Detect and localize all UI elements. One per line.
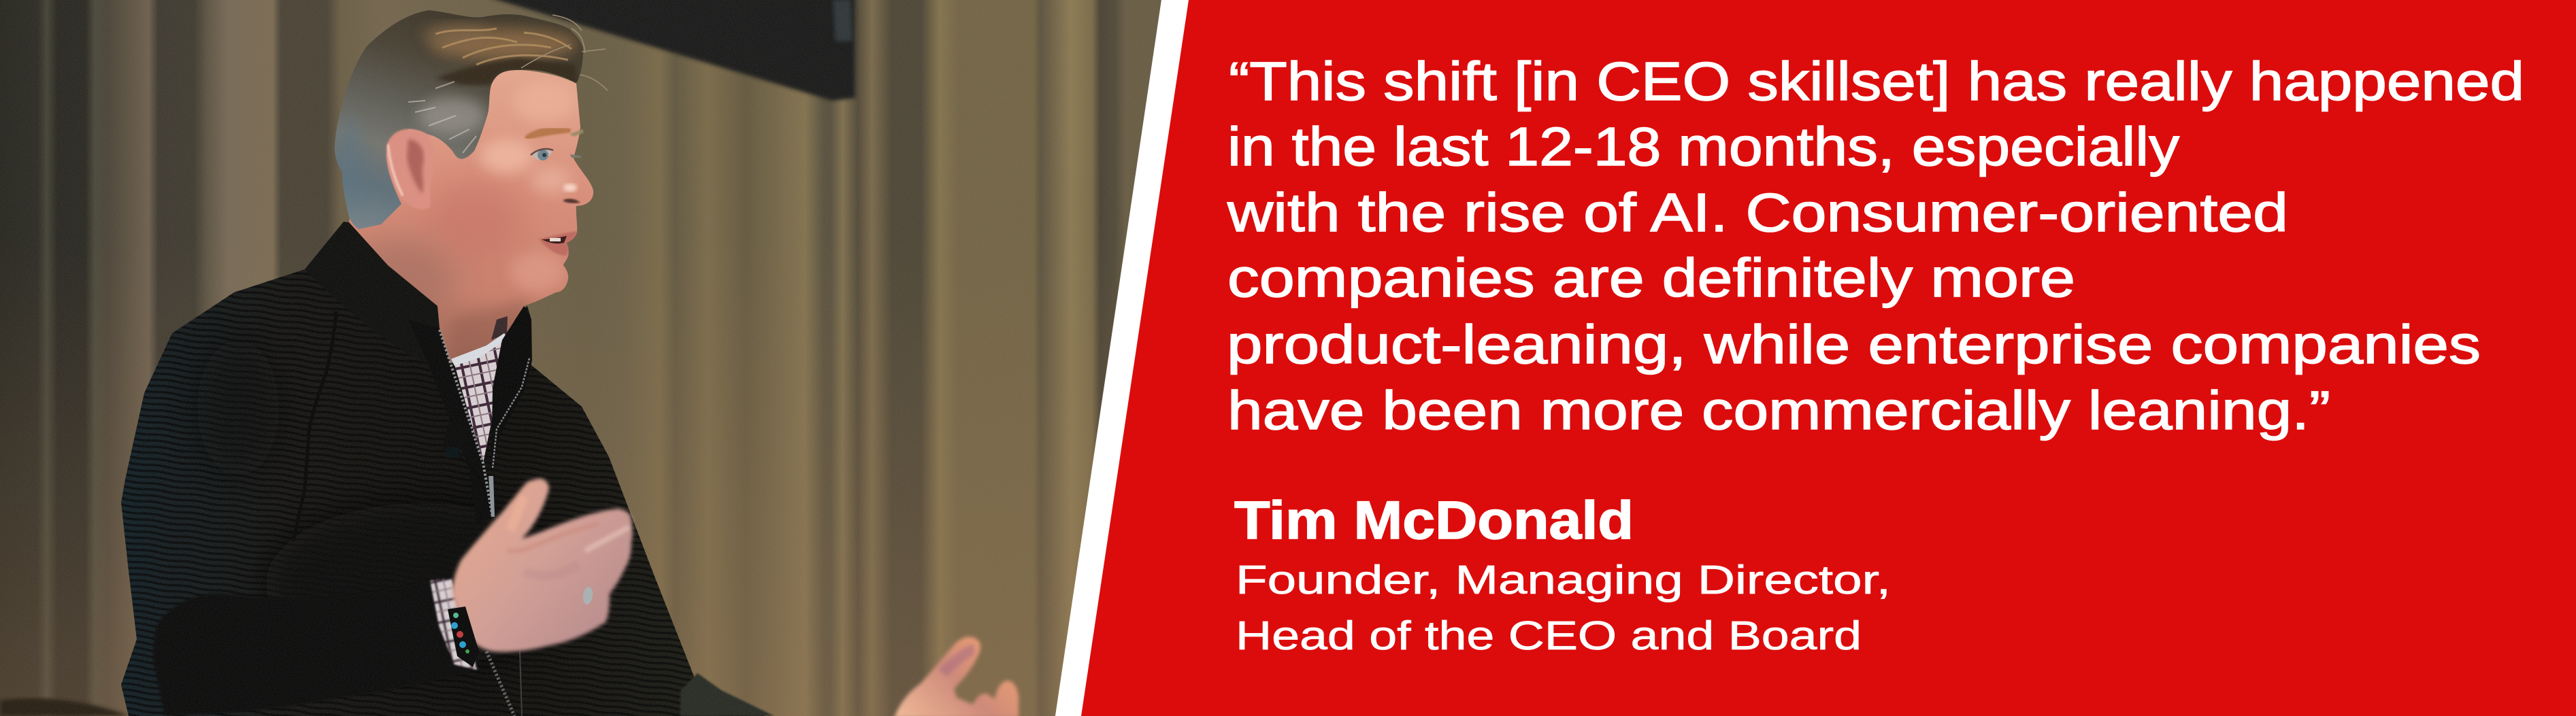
speaker name: Tim McDonald	[1234, 490, 1634, 550]
ring	[582, 586, 594, 605]
hair	[327, 0, 608, 235]
quote text: with the rise of AI. Consumer-oriented	[1227, 182, 2288, 243]
raglan seam	[293, 311, 336, 541]
wrist bracelet	[448, 607, 479, 667]
mouth	[539, 231, 577, 256]
eyebrow far	[570, 129, 584, 137]
zippers	[440, 330, 529, 716]
far eye lashes	[570, 154, 582, 158]
film grain	[0, 0, 1170, 716]
quote text: “This shift [in CEO skillset] has really happened	[1229, 51, 2524, 112]
upper collar	[305, 222, 437, 305]
quote text: have been more commercially leaning.”	[1227, 380, 2330, 441]
white diagonal divider	[1055, 0, 1189, 716]
quote text: companies are definitely more	[1227, 248, 2075, 308]
curtain backdrop	[0, 0, 1170, 716]
lower open hand	[894, 637, 1019, 716]
shirt collar and placket	[429, 306, 532, 468]
neck and face	[347, 69, 593, 367]
right sleeve at bottom	[680, 673, 774, 716]
sleeve forearm	[152, 593, 444, 716]
quote text: product-leaning, while enterprise companies	[1227, 314, 2481, 375]
jacket	[116, 218, 769, 716]
speaker title: Founder, Managing Director,	[1236, 558, 1891, 602]
ear	[386, 129, 434, 209]
shirt cuff	[430, 578, 477, 670]
chair back at lower left	[0, 698, 129, 716]
stray hairs	[521, 15, 608, 90]
eyebrow near	[526, 129, 570, 138]
red quote panel	[1081, 0, 2576, 716]
zipper pull	[489, 476, 495, 517]
raised hand	[452, 479, 633, 652]
lapel microphone	[444, 417, 486, 500]
nose shading	[563, 184, 580, 203]
dark ceiling banner	[484, 0, 855, 101]
photo: speaker in front of curtains	[0, 0, 1170, 716]
speaker title: Head of the CEO and Board	[1236, 613, 1862, 658]
speaker title	[1236, 558, 1891, 658]
quote text	[1227, 51, 2524, 441]
eye	[531, 149, 553, 160]
quote text: in the last 12-18 months, especially	[1227, 116, 2179, 177]
